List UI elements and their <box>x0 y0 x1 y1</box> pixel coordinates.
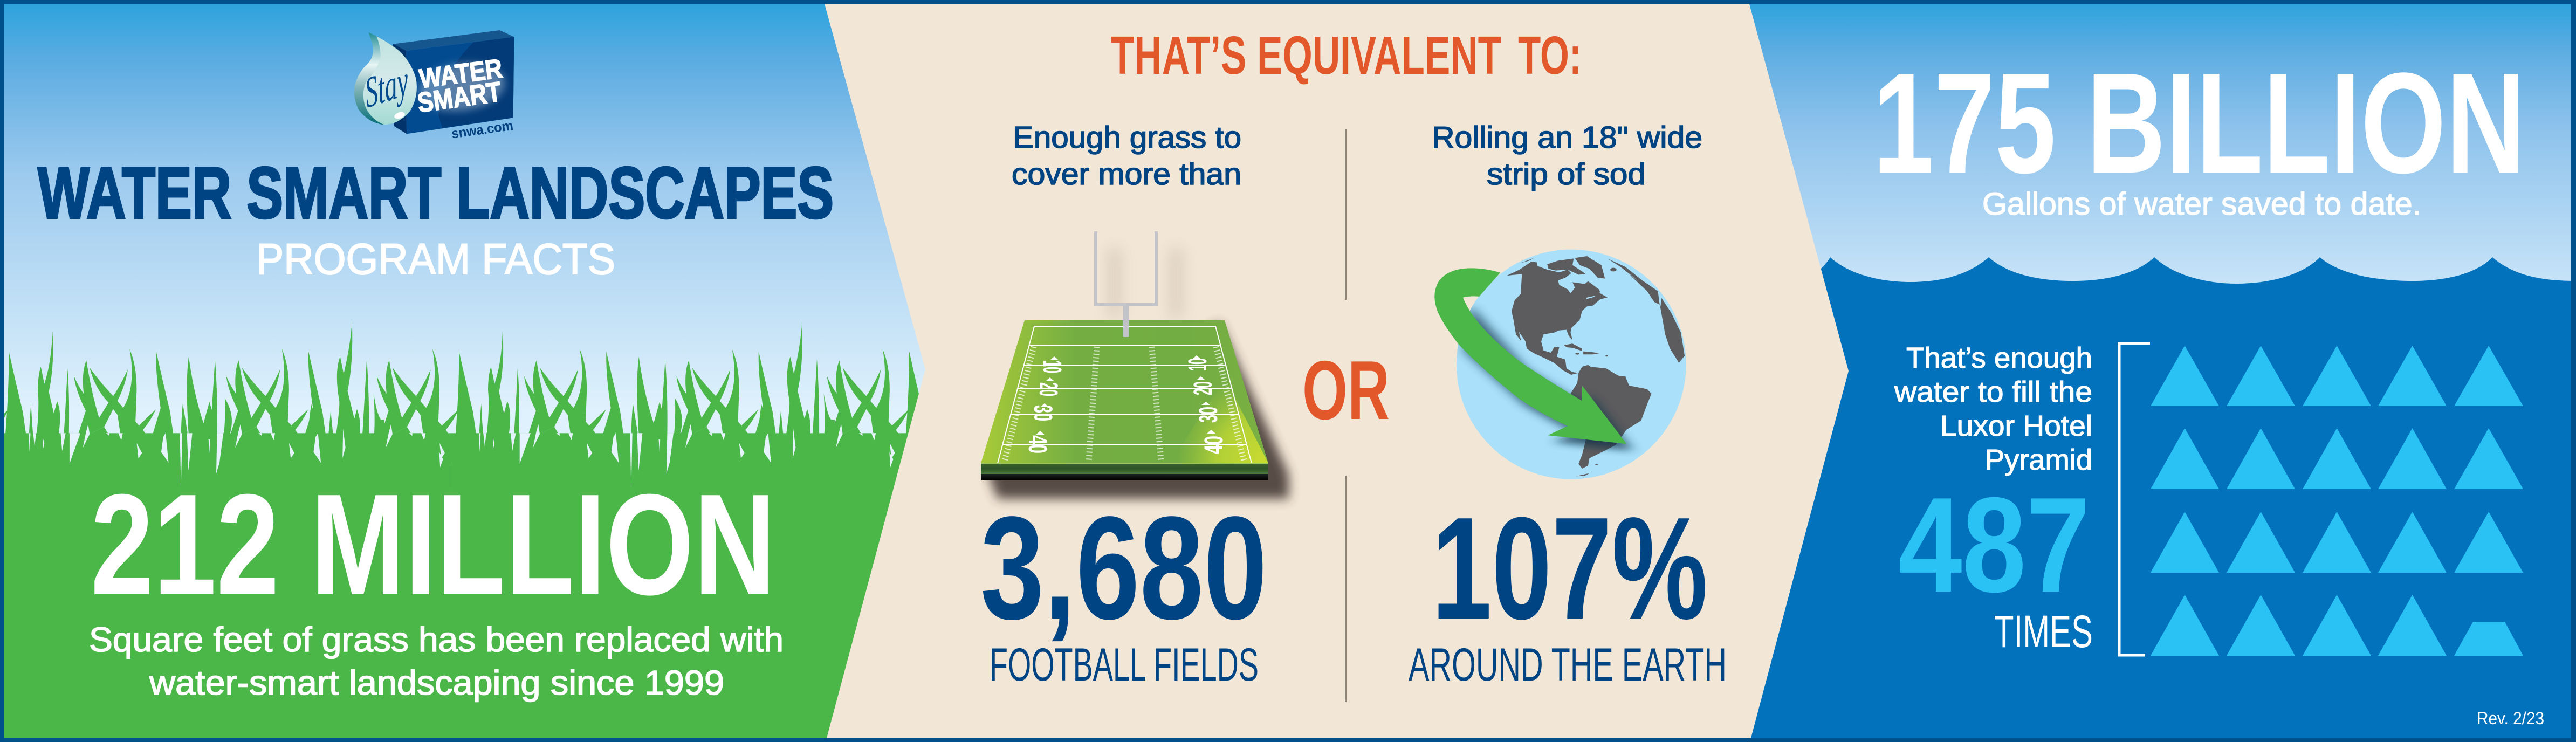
heading: That's equivalent to: THAT’S EQUIVALENT <box>1111 25 1501 86</box>
text: rolling sod line 2: strip of sod <box>1487 157 1646 191</box>
text: luxor description: Pyramid <box>1985 444 2092 476</box>
bracket <box>2119 343 2150 655</box>
text: rolling sod line 1: Rolling an 18" wide <box>1432 120 1702 155</box>
field yard numbers left: 40 <box>1023 435 1052 454</box>
field lines <box>998 326 1252 463</box>
field yard numbers left: 20 <box>1034 382 1062 396</box>
logo script Stay: Stay <box>363 56 411 118</box>
goal post <box>1094 231 1158 337</box>
label: football fields: FOOTBALL FIELDS <box>990 639 1259 691</box>
logo url: snwa.com <box>451 118 514 142</box>
logo wordmark WATER: WATER <box>417 53 504 94</box>
text: luxor description: Luxor Hotel <box>1940 410 2092 442</box>
stat: 107%: 107% <box>1432 487 1708 650</box>
stat: 487: 487 <box>1898 470 2090 621</box>
text: luxor description: That’s enough <box>1906 342 2092 374</box>
field yard numbers right: 30 <box>1194 407 1223 423</box>
panel: right water area with wave edge <box>1726 257 2576 742</box>
stat: 212 million: 212 MILLION <box>91 464 775 625</box>
panel: center cream chevron <box>823 0 1849 742</box>
field yard numbers left: 30 <box>1028 405 1057 421</box>
field yard numbers left: 10 <box>1038 360 1066 373</box>
text: enough grass line 2: cover more than <box>1012 157 1241 191</box>
green arrow <box>1434 268 1626 444</box>
pictogram: pyramids <box>2151 346 2523 656</box>
continents <box>1506 256 1685 476</box>
logo wordmark SMART: SMART <box>416 76 503 119</box>
heading: Water Smart Landscapes: WATER SMART LANDSCAPES <box>38 152 834 233</box>
logo water drop <box>354 32 417 125</box>
text: revision date: Rev. 2/23 <box>2477 709 2544 728</box>
logo: Stay Water Smart <box>354 30 514 142</box>
text: luxor description <box>1894 342 2092 476</box>
field front edge <box>981 463 1268 474</box>
heading: That's equivalent to: TO: <box>1518 25 1582 86</box>
globe ocean <box>1457 250 1686 479</box>
subheading: Program Facts: PROGRAM FACTS <box>256 235 615 284</box>
panel: right sky background <box>1726 0 2576 302</box>
field drop shadow <box>988 322 1289 499</box>
label: times: TIMES <box>1994 606 2093 657</box>
stat: 3,680: 3,680 <box>980 486 1267 650</box>
field yard numbers right <box>1184 358 1228 454</box>
text: gallons saved: Gallons of water saved to date. <box>1982 187 2421 222</box>
arrow shadow on globe <box>1465 304 1633 451</box>
field yard arrows <box>1036 355 1215 435</box>
logo box <box>393 30 514 134</box>
text: enough grass line 1: Enough grass to <box>1013 120 1241 155</box>
field yard numbers left <box>1023 360 1066 454</box>
field yard numbers right: 20 <box>1189 381 1218 395</box>
text: grass replaced line 1: Square feet of grass has been replaced with <box>89 620 784 659</box>
icon: football field <box>981 231 1289 499</box>
label: OR: OR <box>1302 343 1390 437</box>
goal post shadows <box>1109 248 1182 318</box>
label: around the earth: AROUND THE EARTH <box>1409 639 1727 691</box>
icon: globe with arrow <box>1434 250 1686 479</box>
text: luxor description: water to fill the <box>1894 376 2092 408</box>
panel: left sky background <box>0 0 971 485</box>
field yard numbers right: 40 <box>1200 436 1228 454</box>
field surface <box>981 320 1268 463</box>
field yard hash marks <box>1005 347 1244 461</box>
icon: football field: 10 <box>1184 358 1212 371</box>
text: grass replaced line 2: water-smart landscaping since 1999 <box>149 663 724 702</box>
panel: grass field with blades <box>0 321 1384 742</box>
